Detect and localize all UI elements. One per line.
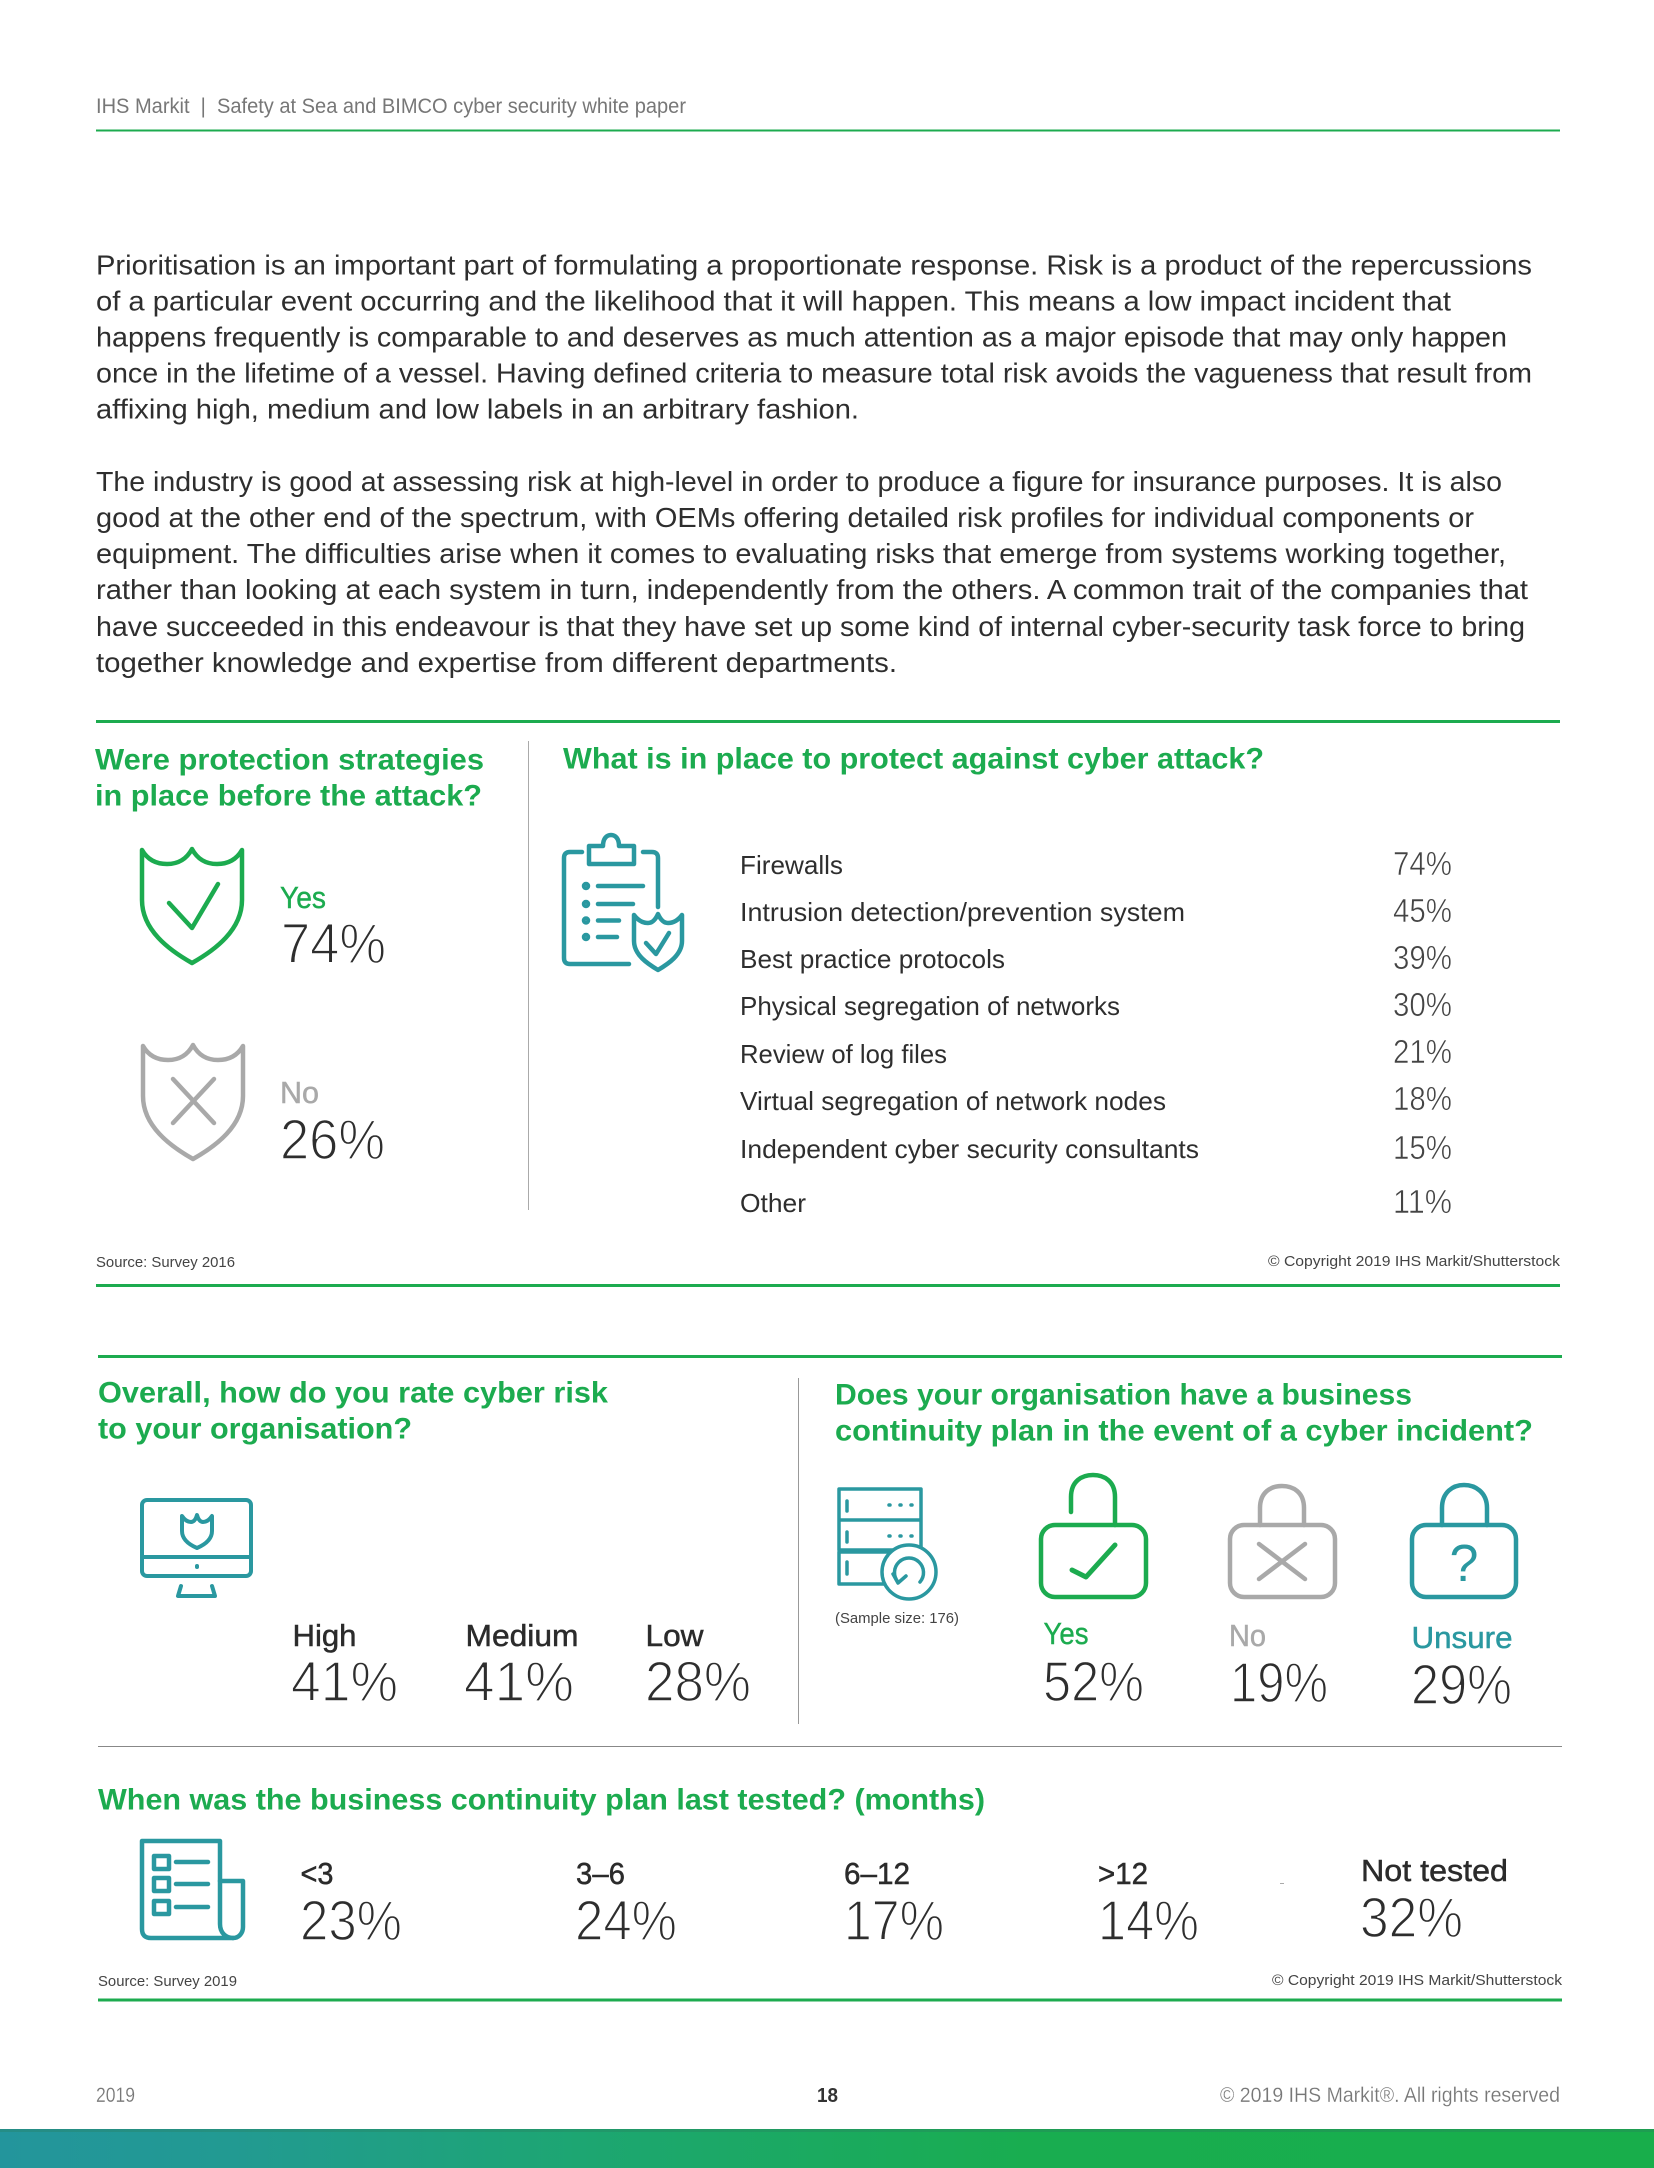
page footer: © 2019 IHS Markit®. All rights reserved — [1220, 2084, 1560, 2107]
list: protection measures with percentages: 30% — [1393, 986, 1452, 1023]
text block: industry assessment paragraph — [96, 466, 1528, 678]
stat: over 12 months 14%: >12 — [1098, 1856, 1148, 1891]
heading: business continuity plan: Does your organisation have a business — [835, 1378, 1412, 1412]
stat: low 28%: Low — [646, 1618, 704, 1653]
stat: under 3 months 23%: 23% — [300, 1889, 402, 1953]
stat: not tested 32%: Not tested — [1361, 1853, 1508, 1888]
stat: over 12 months 14% — [1098, 1856, 1199, 1953]
icon: teal padlock with question mark: ? — [1450, 1535, 1478, 1593]
stat: no 19% — [1229, 1618, 1328, 1715]
footer gradient bar — [0, 2129, 1654, 2168]
list: protection measures with percentages: 74% — [1393, 845, 1452, 882]
text block: risk prioritisation paragraph: happens frequently is comparable to and deserves as much attention as a major episode that may only happen — [96, 322, 1507, 352]
heading: overall cyber risk: Overall, how do you rate cyber risk — [98, 1376, 608, 1410]
stat: no 26%: No — [280, 1075, 319, 1110]
list: protection measures with percentages: Other — [740, 1188, 806, 1218]
stat: medium 41%: Medium — [466, 1618, 578, 1653]
text block: risk prioritisation paragraph: of a particular event occurring and the likelihood that it will happen. This means a low impact incident that — [96, 286, 1451, 316]
stat: 3 to 6 months 24%: 24% — [575, 1889, 677, 1953]
stat: medium 41% — [464, 1618, 578, 1714]
heading: overall cyber risk — [98, 1376, 608, 1446]
page footer — [96, 2084, 1560, 2107]
list: protection measures with percentages: Independent cyber security consultants — [740, 1134, 1199, 1164]
page footer: 2019 — [96, 2084, 135, 2107]
list: protection measures with percentages — [740, 845, 1452, 1220]
panel: what is in place to protect — [563, 742, 1561, 1270]
stat: high 41%: High — [292, 1618, 356, 1653]
stat: low 28% — [645, 1618, 751, 1714]
stat: high 41%: 41% — [291, 1650, 398, 1714]
text block: industry assessment paragraph: together knowledge and expertise from different departments. — [96, 647, 897, 678]
list: protection measures with percentages: Intrusion detection/prevention system — [740, 897, 1185, 927]
sample size note: (Sample size: 176) — [835, 1610, 959, 1627]
heading: when was the plan last tested: When was the business continuity plan last tested? (months) — [98, 1784, 985, 1816]
icon: grey padlock with cross — [1230, 1486, 1335, 1597]
stat: 3 to 6 months 24%: 3–6 — [576, 1856, 625, 1891]
stat: 6 to 12 months 17%: 17% — [844, 1889, 944, 1953]
stat: yes 74% — [280, 880, 386, 976]
list: protection measures with percentages: Physical segregation of networks — [740, 991, 1120, 1021]
copyright note: © Copyright 2019 IHS Markit/Shutterstock — [1272, 1972, 1563, 1989]
list: protection measures with percentages: 39% — [1393, 939, 1452, 976]
stat: yes 52%: Yes — [1044, 1616, 1088, 1651]
stat: medium 41%: 41% — [464, 1650, 574, 1714]
list: protection measures with percentages: 21% — [1393, 1033, 1452, 1070]
list: protection measures with percentages: Review of log files — [740, 1039, 947, 1069]
stat: no 26% — [280, 1075, 385, 1172]
list: protection measures with percentages: 11% — [1393, 1183, 1452, 1220]
stat: low 28%: 28% — [645, 1650, 751, 1714]
icon: teal padlock with question mark — [1412, 1485, 1516, 1597]
stat: yes 52% — [1043, 1616, 1144, 1714]
panel: overall cyber risk rating — [98, 1376, 751, 1714]
stat: no 26%: 26% — [280, 1108, 385, 1172]
text block: industry assessment paragraph: equipment. The difficulties arise when it comes to evaluating risks that emerge from systems working together, — [96, 538, 1506, 569]
heading: were protection strategies in place: in place before the attack? — [95, 780, 482, 812]
heading: business continuity plan — [835, 1378, 1533, 1448]
heading: were protection strategies in place — [95, 744, 484, 812]
text block: industry assessment paragraph: rather than looking at each system in turn, independently from the others. A common trait of the companies that — [96, 574, 1528, 605]
list: protection measures with percentages: Best practice protocols — [740, 944, 1005, 974]
list: protection measures with percentages: 45% — [1393, 892, 1452, 929]
stat: no 19%: No — [1229, 1618, 1266, 1653]
stat: under 3 months 23%: <3 — [300, 1856, 334, 1891]
icon: clipboard with shield — [564, 835, 682, 970]
page header: IHS Markit | Safety at Sea and BIMCO cyber security white paper — [96, 95, 686, 118]
stat: unsure 29%: Unsure — [1412, 1620, 1512, 1655]
stat: no 19%: 19% — [1230, 1651, 1328, 1715]
stat: yes 74%: Yes — [280, 880, 326, 915]
text block: risk prioritisation paragraph: affixing high, medium and low labels in an arbitrary fashion. — [96, 394, 859, 424]
panel: plan last tested — [98, 1784, 1563, 1990]
stat: 3 to 6 months 24% — [575, 1856, 677, 1953]
text block: industry assessment paragraph: good at the other end of the spectrum, with OEMs offering detailed risk profiles for individual components or — [96, 502, 1474, 533]
text block: risk prioritisation paragraph: Prioritisation is an important part of formulating a proportionate response. Risk is a product of the repercussions — [96, 250, 1532, 280]
copyright note: © Copyright 2019 IHS Markit/Shutterstock — [1268, 1253, 1561, 1270]
text block: industry assessment paragraph: have succeeded in this endeavour is that they have set up some kind of internal cyber-security task force to bring — [96, 611, 1525, 642]
icon: grey shield with cross — [143, 1045, 243, 1159]
icon: monitor with shield — [142, 1500, 251, 1596]
stat: 6 to 12 months 17%: 6–12 — [844, 1856, 910, 1891]
stat: yes 74%: 74% — [281, 912, 386, 976]
heading: business continuity plan: continuity plan in the event of a cyber incident? — [835, 1414, 1533, 1448]
icon: server with restore symbol — [839, 1489, 936, 1599]
stat: high 41% — [291, 1618, 398, 1714]
stat: over 12 months 14%: 14% — [1098, 1889, 1199, 1953]
page footer: 18 — [817, 2085, 838, 2107]
icon: green shield with check — [142, 849, 242, 963]
stat: not tested 32% — [1360, 1853, 1508, 1950]
panel: protection strategies before attack — [95, 744, 484, 1271]
heading: were protection strategies in place: Were protection strategies — [95, 744, 484, 776]
stat: under 3 months 23% — [300, 1856, 402, 1953]
source note 2016: Source: Survey 2016 — [96, 1254, 235, 1271]
panel: business continuity plan — [835, 1378, 1533, 1717]
text block: risk prioritisation paragraph: once in the lifetime of a vessel. Having defined criteria to measure total risk avoids the vagueness that result from — [96, 358, 1532, 388]
stat: not tested 32%: 32% — [1360, 1886, 1463, 1950]
stat: yes 52%: 52% — [1043, 1650, 1144, 1714]
stat: unsure 29% — [1411, 1620, 1512, 1717]
text block: industry assessment paragraph: The industry is good at assessing risk at high-level in order to produce a figure for insurance purposes. It is also — [96, 466, 1502, 497]
list: protection measures with percentages: 18% — [1393, 1080, 1452, 1117]
heading: overall cyber risk: to your organisation? — [98, 1412, 412, 1446]
list: protection measures with percentages: 15% — [1393, 1129, 1452, 1166]
stat: 6 to 12 months 17% — [844, 1856, 944, 1953]
heading: what is in place: What is in place to protect against cyber attack? — [563, 742, 1264, 776]
text block: risk prioritisation paragraph — [96, 250, 1532, 424]
icon: green open padlock with check — [1041, 1475, 1146, 1597]
icon: document checklist — [142, 1841, 243, 1938]
stat: unsure 29%: 29% — [1411, 1653, 1512, 1717]
list: protection measures with percentages: Firewalls — [740, 850, 843, 880]
source note 2019: Source: Survey 2019 — [98, 1973, 237, 1990]
list: protection measures with percentages: Virtual segregation of network nodes — [740, 1086, 1166, 1116]
